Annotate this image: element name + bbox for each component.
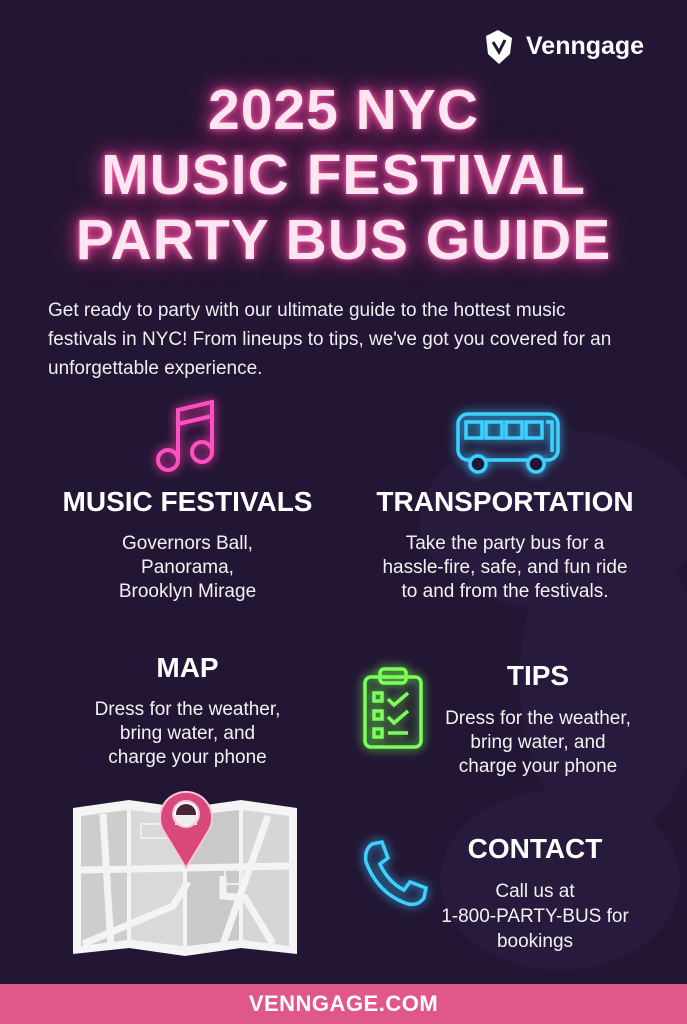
text: transportation: to and from the festivals. [402,581,608,602]
title [61,72,622,277]
text: contact: bookings [497,931,573,952]
text: tips: charge your phone [459,756,617,777]
panel: map [95,652,280,768]
panel: transportation [376,486,634,602]
intro text: Get ready to party with our ultimate guide to the hottest music festivals in NYC! From lineups to tips, we've got you covered for an unforgettable experience. [48,300,611,379]
text: tips: bring water, and [470,732,606,753]
text: festivals [119,533,256,602]
panel: tips [445,660,631,777]
text: transportation [382,533,628,602]
text: festivals: Panorama, [141,557,234,578]
heading: map: MAP [156,652,219,683]
text: map: Dress for the weather, [95,699,280,720]
text: map [95,699,280,768]
text: contact: Call us at [495,881,575,902]
icon: folded map with pin [73,790,297,956]
text: tips: Dress for the weather, [445,708,631,729]
logo: Venngage: Venngage [526,32,644,60]
footer bar [0,984,687,1024]
icon: clipboard [355,659,431,757]
footer bar: VENNGAGE.COM [249,991,438,1016]
heading: tips: TIPS [507,660,569,691]
title: MUSIC FESTIVAL [101,143,586,207]
heading: music festivals: MUSIC FESTIVALS [63,486,312,517]
heading: contact: CONTACT [468,833,602,864]
text: tips [445,708,631,777]
icon: bus [448,404,568,481]
text: contact [441,881,629,952]
panel: contact [441,833,629,952]
text: map: bring water, and [120,723,255,744]
text: contact: 1-800-PARTY-BUS for [441,906,629,927]
text: transportation: hassle-fire, safe, and fun ride [382,557,628,578]
panel: music festivals [63,486,312,602]
text: festivals: Brooklyn Mirage [119,581,256,602]
heading: transportation: TRANSPORTATION [376,486,634,517]
text: map: charge your phone [108,747,267,768]
text: transportation: Take the party bus for a [406,533,604,554]
title: PARTY BUS GUIDE [76,208,611,272]
title: 2025 NYC [208,78,479,142]
text: festivals: Governors Ball, [122,533,253,554]
logo: Venngage [486,30,644,64]
icon: phone [356,834,434,914]
icon: music note [148,393,222,480]
